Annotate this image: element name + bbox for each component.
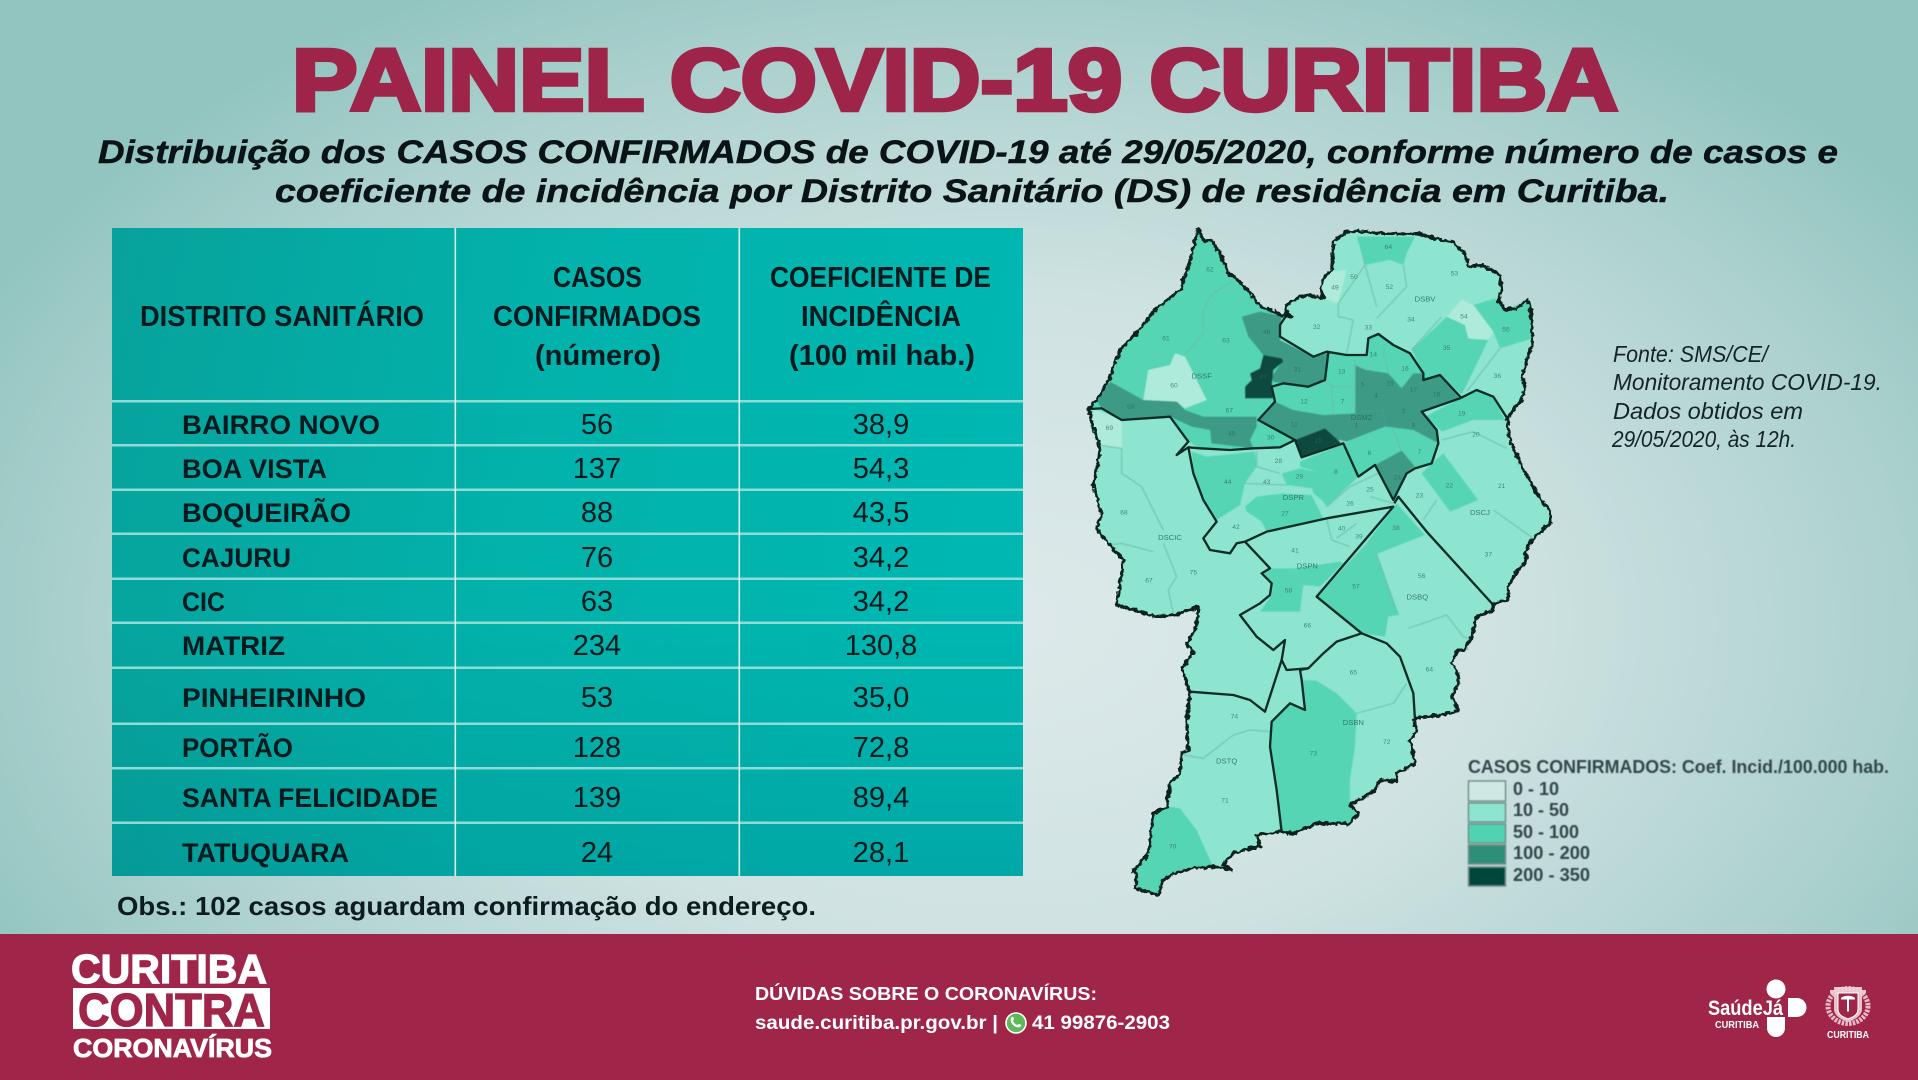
row: CIC: CIC bbox=[182, 587, 225, 617]
map numeric and district labels: 5 bbox=[1361, 382, 1365, 389]
map numeric and district labels: 57 bbox=[1352, 583, 1360, 590]
contact info: saude.curitiba.pr.gov.br | bbox=[755, 1013, 998, 1034]
map numeric and district labels: 74 bbox=[1231, 713, 1238, 720]
map outline bbox=[1088, 228, 1550, 895]
map numeric and district labels: DSCIC bbox=[1158, 533, 1182, 542]
map legend bbox=[1468, 757, 1889, 886]
icon: whatsapp bbox=[1006, 1013, 1026, 1033]
row: Tatuquara: 28,1 bbox=[853, 837, 909, 869]
map numeric and district labels: 53 bbox=[1451, 271, 1458, 278]
source note bbox=[1611, 341, 1882, 452]
map numeric and district labels: 12 bbox=[1300, 398, 1308, 405]
map numeric and district labels: DSTQ bbox=[1216, 757, 1237, 766]
legend labels: 0 - 10 bbox=[1513, 779, 1559, 799]
map numeric and district labels: 19 bbox=[1458, 411, 1466, 418]
map numeric and district labels: 52 bbox=[1386, 284, 1393, 291]
map numeric and district labels: 73 bbox=[1310, 751, 1317, 758]
map numeric and district labels: 72 bbox=[1383, 739, 1391, 746]
map numeric and district labels: 44 bbox=[1224, 479, 1232, 486]
row: Tatuquara: 24 bbox=[581, 837, 613, 869]
source note: 29/05/2020, às 12h. bbox=[1611, 426, 1796, 452]
map numeric and district labels bbox=[1106, 244, 1510, 850]
map numeric and district labels: 70 bbox=[1169, 843, 1177, 850]
row: Boqueirão: 88 bbox=[581, 497, 613, 529]
map numeric and district labels: DSBQ bbox=[1406, 592, 1428, 601]
map numeric and district labels: 43 bbox=[1263, 479, 1271, 486]
campaign logo: CONTRA bbox=[78, 984, 265, 1036]
campaign logo bbox=[71, 946, 272, 1063]
contact info: DÚVIDAS SOBRE O CORONAVÍRUS: bbox=[755, 983, 1097, 1004]
map numeric and district labels: 9 bbox=[1411, 422, 1415, 429]
map numeric and district labels: 67 bbox=[1226, 407, 1233, 414]
row: CIC bbox=[182, 586, 909, 618]
map numeric and district labels: 54 bbox=[1460, 313, 1468, 320]
map numeric and district labels: 11 bbox=[1291, 421, 1298, 428]
contact info bbox=[755, 983, 1170, 1034]
map numeric and district labels: 62 bbox=[1206, 267, 1214, 274]
map numeric and district labels: DSPR bbox=[1283, 493, 1304, 502]
row: Bairro Novo bbox=[182, 409, 909, 441]
map numeric and district labels: 59 bbox=[1127, 404, 1135, 411]
row: Boqueirão bbox=[182, 497, 909, 529]
map numeric and district labels: 16 bbox=[1401, 366, 1409, 373]
map numeric and district labels: 24 bbox=[1394, 475, 1401, 482]
subtitle bbox=[98, 134, 1838, 209]
row: Cajuru bbox=[182, 542, 909, 574]
map numeric and district labels: 27 bbox=[1281, 511, 1289, 518]
table header bbox=[140, 262, 991, 372]
subtitle: Distribuição dos CASOS CONFIRMADOS de COVID-19 até 29/05/2020, conforme número de casos e bbox=[98, 134, 1838, 170]
map numeric and district labels: 40 bbox=[1338, 526, 1346, 533]
map numeric and district labels: 41 bbox=[1291, 547, 1299, 554]
map numeric and district labels: 1 bbox=[1355, 422, 1359, 429]
footer band bbox=[0, 934, 1918, 1080]
row: Boqueirão: BOQUEIRÃO bbox=[182, 497, 351, 528]
map numeric and district labels: 29 bbox=[1296, 473, 1303, 480]
map numeric and district labels: 25 bbox=[1366, 487, 1374, 494]
choropleth map bbox=[1088, 228, 1550, 895]
logo: Curitiba city crest bbox=[1827, 987, 1869, 1041]
map numeric and district labels: 32 bbox=[1313, 324, 1321, 331]
map numeric and district labels: 28 bbox=[1275, 458, 1282, 465]
table header: COEFICIENTE DE bbox=[770, 262, 991, 294]
row: Bairro Novo: 38,9 bbox=[853, 409, 909, 441]
map numeric and district labels: 63 bbox=[1222, 337, 1230, 344]
observation note: Obs.: 102 casos aguardam confirmação do endereço. bbox=[117, 891, 816, 921]
logo: Saúde Já Curitiba: CURITIBA bbox=[1715, 1019, 1759, 1031]
map numeric and district labels: DSMZ bbox=[1351, 413, 1373, 422]
map numeric and district labels: 34 bbox=[1407, 317, 1415, 324]
map numeric and district labels: 64 bbox=[1385, 244, 1392, 251]
row: Santa Felicidade: 139 bbox=[573, 782, 621, 814]
map numeric and district labels: 71 bbox=[1221, 797, 1229, 804]
row: CIC: 34,2 bbox=[853, 586, 909, 618]
table header: CASOS bbox=[553, 262, 642, 294]
map numeric and district labels: 18 bbox=[1433, 391, 1441, 398]
row: Matriz: 130,8 bbox=[845, 630, 917, 662]
subtitle: coeficiente de incidência por Distrito Sanitário (DS) de residência em Curitiba. bbox=[275, 173, 1669, 209]
source note: Dados obtidos em bbox=[1613, 398, 1803, 424]
map numeric and district labels: 36 bbox=[1494, 373, 1501, 380]
row: Bairro Novo: 56 bbox=[581, 409, 613, 441]
map numeric and district labels: 37 bbox=[1485, 552, 1492, 559]
map numeric and district labels: 4 bbox=[1374, 392, 1378, 399]
row: Portão bbox=[182, 732, 909, 764]
row: Matriz: MATRIZ bbox=[182, 631, 285, 661]
row: Tatuquara bbox=[182, 837, 909, 869]
map numeric and district labels: 66 bbox=[1304, 622, 1311, 629]
map numeric and district labels: 42 bbox=[1232, 524, 1240, 531]
row: Pinheirinho: 35,0 bbox=[853, 682, 909, 714]
map numeric and district labels: 56 bbox=[1418, 573, 1426, 580]
table header: (100 mil hab.) bbox=[789, 340, 975, 372]
map numeric and district labels: 68 bbox=[1120, 510, 1128, 517]
map numeric and district labels: DSSF bbox=[1191, 371, 1212, 380]
legend labels: 50 - 100 bbox=[1513, 822, 1579, 842]
logo: Curitiba city crest: CURITIBA bbox=[1827, 1029, 1869, 1041]
source note: Monitoramento COVID-19. bbox=[1613, 369, 1882, 395]
source note: Fonte: SMS/CE/ bbox=[1613, 341, 1770, 367]
legend labels: 200 - 350 bbox=[1513, 865, 1590, 885]
map numeric and district labels: 39 bbox=[1355, 533, 1363, 540]
map numeric and district labels: 38 bbox=[1392, 525, 1400, 532]
map numeric and district labels: DSBN bbox=[1343, 718, 1364, 727]
map numeric and district labels: 15 bbox=[1386, 381, 1394, 388]
map legend: CASOS CONFIRMADOS: Coef. Incid./100.000 hab. bbox=[1468, 757, 1889, 777]
map numeric and district labels: 23 bbox=[1416, 492, 1423, 499]
legend swatches bbox=[1468, 781, 1506, 886]
row: Portão: PORTÃO bbox=[182, 732, 293, 763]
map numeric and district labels: 64 bbox=[1426, 667, 1433, 674]
row: Matriz: 234 bbox=[573, 630, 621, 662]
row: Matriz bbox=[182, 630, 917, 662]
logo: Saúde Já Curitiba: SaúdeJá bbox=[1708, 997, 1783, 1020]
table header: (número) bbox=[535, 340, 661, 372]
row: Cajuru: 76 bbox=[581, 542, 613, 574]
map numeric and district labels: 67 bbox=[1145, 577, 1153, 584]
map numeric and district labels: 55 bbox=[1502, 327, 1510, 334]
map numeric and district labels: 49 bbox=[1331, 285, 1339, 292]
campaign logo: CURITIBA bbox=[71, 946, 267, 992]
map numeric and district labels: 45 bbox=[1228, 431, 1236, 438]
map numeric and district labels: 33 bbox=[1365, 325, 1372, 332]
row: Portão: 128 bbox=[573, 732, 621, 764]
contact info: 41 99876-2903 bbox=[1032, 1013, 1170, 1034]
map numeric and district labels: 60 bbox=[1170, 382, 1178, 389]
map numeric and district labels: 7 bbox=[1417, 449, 1421, 456]
map numeric and district labels: 7 bbox=[1341, 399, 1345, 406]
map numeric and district labels: DSCJ bbox=[1470, 508, 1490, 517]
table header: INCIDÊNCIA bbox=[801, 299, 961, 333]
row: Santa Felicidade: SANTA FELICIDADE bbox=[182, 783, 438, 813]
row: Boa Vista: 54,3 bbox=[853, 453, 909, 485]
district boundaries bbox=[1090, 315, 1508, 832]
logo: Saúde Já Curitiba bbox=[1708, 980, 1806, 1037]
table header: CONFIRMADOS bbox=[493, 301, 701, 333]
legend labels: 10 - 50 bbox=[1513, 800, 1569, 820]
map numeric and district labels: DSBV bbox=[1415, 295, 1436, 304]
title: PAINEL COVID-19 CURITIBA bbox=[292, 32, 1618, 129]
map numeric and district labels: 58 bbox=[1285, 587, 1292, 594]
map base and coloured districts bbox=[1088, 228, 1550, 895]
table panel bbox=[112, 228, 1023, 876]
row: Bairro Novo: BAIRRO NOVO bbox=[182, 410, 380, 440]
row: Pinheirinho bbox=[182, 682, 909, 714]
row: Santa Felicidade bbox=[182, 782, 909, 814]
row: Pinheirinho: PINHEIRINHO bbox=[182, 683, 366, 713]
map numeric and district labels: 69 bbox=[1106, 425, 1113, 432]
row: Portão: 72,8 bbox=[853, 732, 909, 764]
row: Santa Felicidade: 89,4 bbox=[853, 782, 909, 814]
row: Boa Vista bbox=[182, 453, 909, 485]
row: Cajuru: CAJURU bbox=[182, 543, 291, 573]
map numeric and district labels: 75 bbox=[1190, 570, 1197, 577]
map numeric and district labels: 13 bbox=[1338, 368, 1346, 375]
map numeric and district labels: 46 bbox=[1263, 329, 1271, 336]
map numeric and district labels: 30 bbox=[1267, 435, 1275, 442]
row: CIC: 63 bbox=[581, 586, 613, 618]
map numeric and district labels: 8 bbox=[1334, 469, 1338, 476]
map numeric and district labels: 47 bbox=[1260, 373, 1267, 380]
map numeric and district labels: 22 bbox=[1446, 482, 1453, 489]
map numeric and district labels: 26 bbox=[1346, 501, 1354, 508]
row: Pinheirinho: 53 bbox=[581, 682, 613, 714]
map numeric and district labels: 21 bbox=[1498, 483, 1506, 490]
row: Cajuru: 34,2 bbox=[853, 542, 909, 574]
legend labels bbox=[1513, 779, 1590, 885]
map numeric and district labels: 3 bbox=[1401, 408, 1405, 415]
map numeric and district labels: 61 bbox=[1162, 336, 1170, 343]
legend labels: 100 - 200 bbox=[1513, 843, 1590, 863]
row: Boqueirão: 43,5 bbox=[853, 497, 909, 529]
map numeric and district labels: DSPN bbox=[1297, 562, 1318, 571]
row: Tatuquara: TATUQUARA bbox=[182, 838, 349, 868]
table header: DISTRITO SANITÁRIO bbox=[140, 299, 424, 333]
map numeric and district labels: 6 bbox=[1367, 450, 1371, 457]
map numeric and district labels: 20 bbox=[1472, 432, 1480, 439]
map numeric and district labels: 50 bbox=[1350, 274, 1358, 281]
campaign logo: CORONAVÍRUS bbox=[73, 1033, 272, 1063]
map numeric and district labels: 31 bbox=[1294, 367, 1301, 374]
map numeric and district labels: 10 bbox=[1315, 438, 1322, 445]
map numeric and district labels: 14 bbox=[1370, 351, 1377, 358]
map numeric and district labels: 35 bbox=[1443, 345, 1451, 352]
row: Boa Vista: BOA VISTA bbox=[182, 454, 327, 484]
map numeric and district labels: 65 bbox=[1350, 669, 1357, 676]
map numeric and district labels: 17 bbox=[1410, 387, 1417, 394]
row: Boa Vista: 137 bbox=[573, 453, 621, 485]
